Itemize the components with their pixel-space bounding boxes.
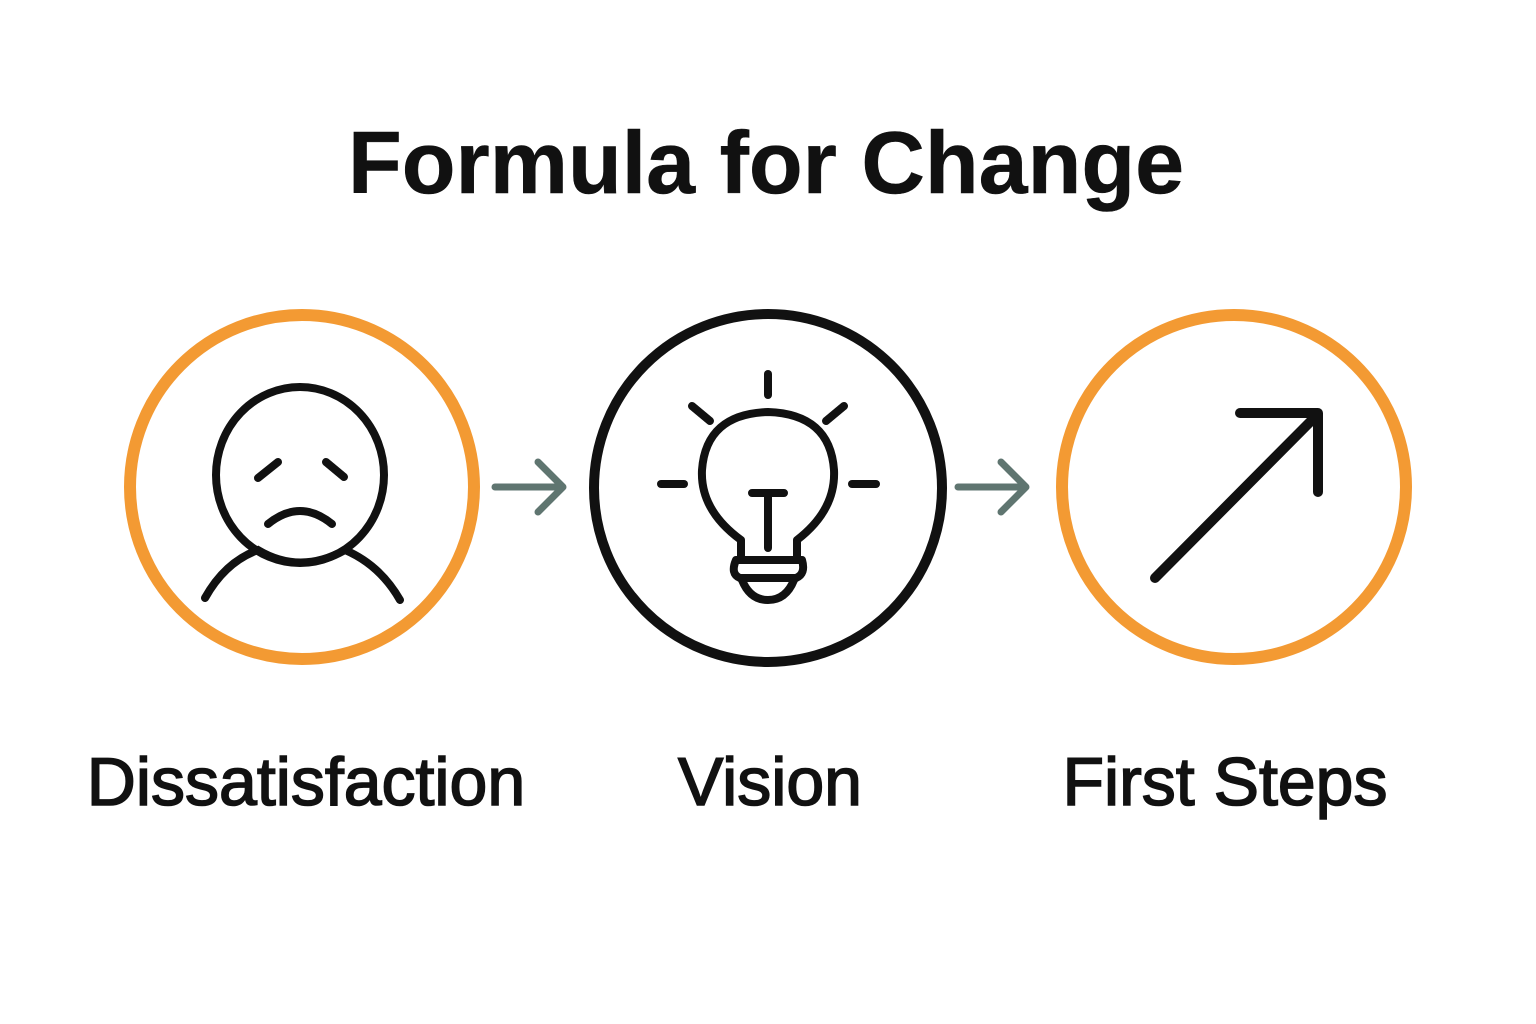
panel: first steps circle — [1062, 315, 1406, 659]
label: first steps: First Steps — [1063, 744, 1387, 820]
arrow 2 — [958, 462, 1026, 512]
panel: dissatisfaction circle — [130, 315, 474, 659]
icon: light bulb — [661, 374, 876, 600]
label: dissatisfaction: Dissatisfaction — [87, 744, 525, 820]
icon: diagonal arrow — [1155, 413, 1318, 578]
icon: sad face — [205, 387, 400, 600]
panel: vision circle — [594, 314, 942, 662]
label: vision: Vision — [678, 744, 862, 820]
title: Formula for Change — [348, 113, 1184, 212]
arrow 1 — [495, 462, 563, 512]
